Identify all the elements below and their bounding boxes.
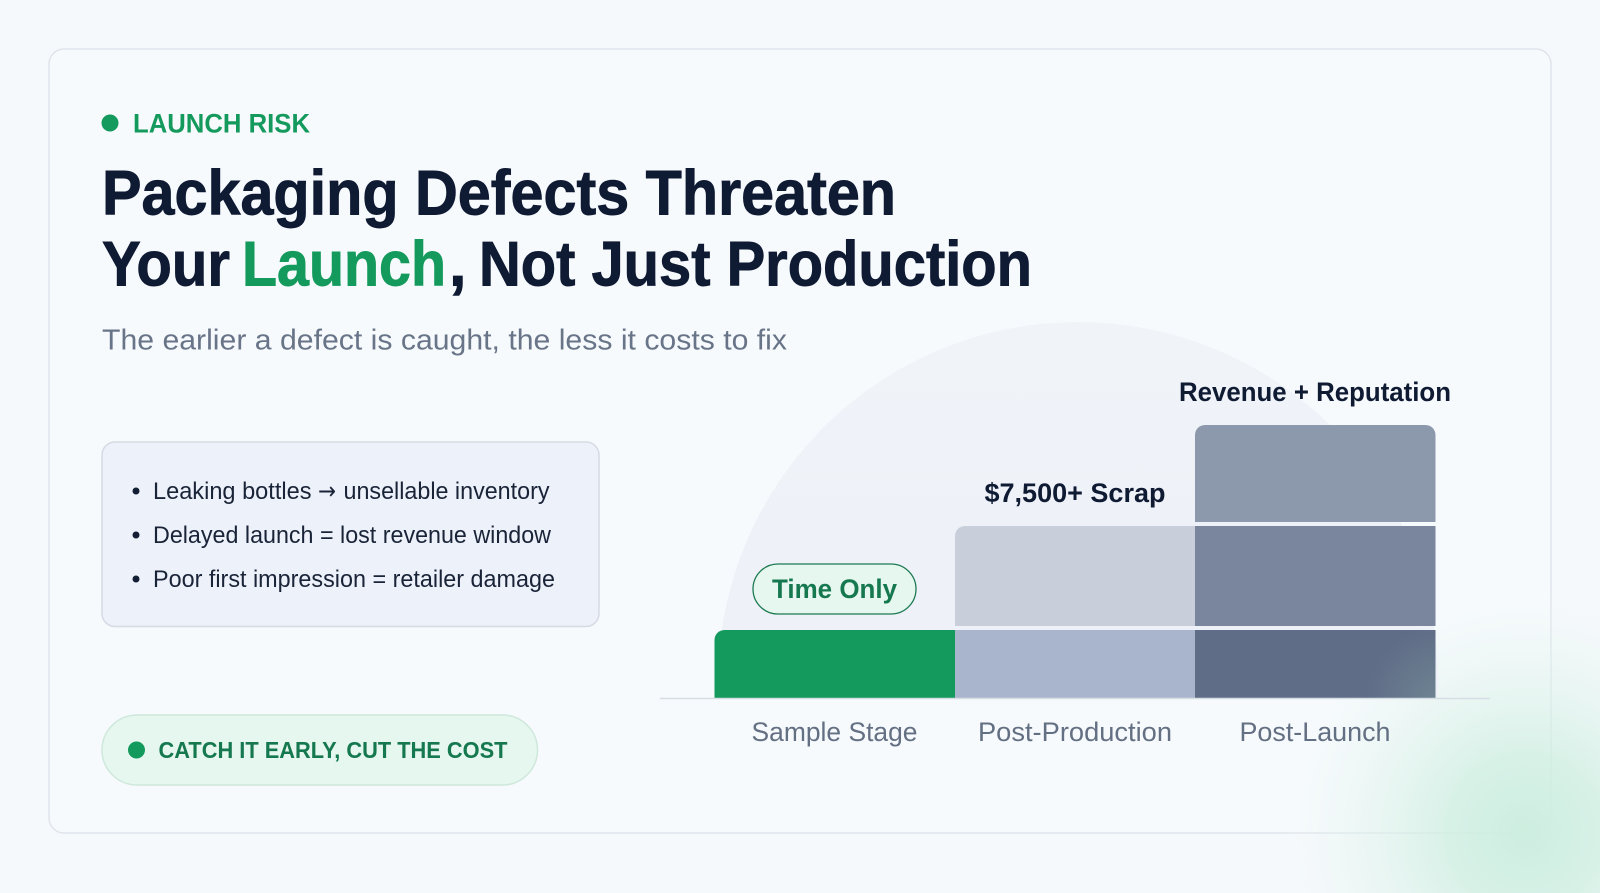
callout: catch it early: [102, 715, 538, 785]
bullet: poor first impression: Poor first impression = retailer damage: [153, 566, 555, 593]
label: post-production: Post-Production: [978, 717, 1172, 747]
bar: post-production: [955, 526, 1195, 698]
label: post-launch: Post-Launch: [1240, 717, 1390, 747]
value label: scrap: $7,500+ Scrap: [984, 478, 1166, 508]
callout: catch it early: CATCH IT EARLY, CUT THE COST: [158, 737, 508, 763]
axis labels: [752, 717, 1390, 747]
badge: time only: Time Only: [772, 574, 897, 604]
bullet: delayed launch: Delayed launch = lost revenue window: [153, 522, 552, 549]
title: ,: [449, 230, 467, 300]
bullet: leaking bottles: Leaking bottles: [153, 478, 312, 505]
title: Your: [102, 230, 230, 300]
label: sample stage: Sample Stage: [752, 717, 918, 747]
bar: sample stage: [714, 630, 955, 698]
bullet: leaking bottles: →: [318, 477, 336, 505]
title: Not Just Production: [479, 230, 1032, 300]
axis baseline: [660, 698, 1490, 700]
subtitle: The earlier a defect is caught, the less it costs to fix: [102, 324, 788, 356]
badge: time only: [753, 564, 916, 614]
chart: cost escalation steps: [660, 425, 1490, 698]
eyebrow: launch risk: LAUNCH RISK: [133, 108, 310, 138]
green corner glow: [1275, 582, 1600, 893]
value label: revenue and reputation: Revenue + Reputation: [1179, 377, 1451, 407]
backdrop semicircle: [718, 322, 1438, 698]
title: [102, 158, 1032, 300]
bullet: leaking bottles: [132, 477, 550, 505]
bar: post-launch: [1195, 425, 1436, 698]
panel: risk bullet list: [102, 442, 599, 626]
title: Packaging Defects Threaten: [102, 158, 896, 228]
title: Launch: [242, 230, 446, 300]
bullet: leaking bottles: unsellable inventory: [344, 478, 550, 505]
